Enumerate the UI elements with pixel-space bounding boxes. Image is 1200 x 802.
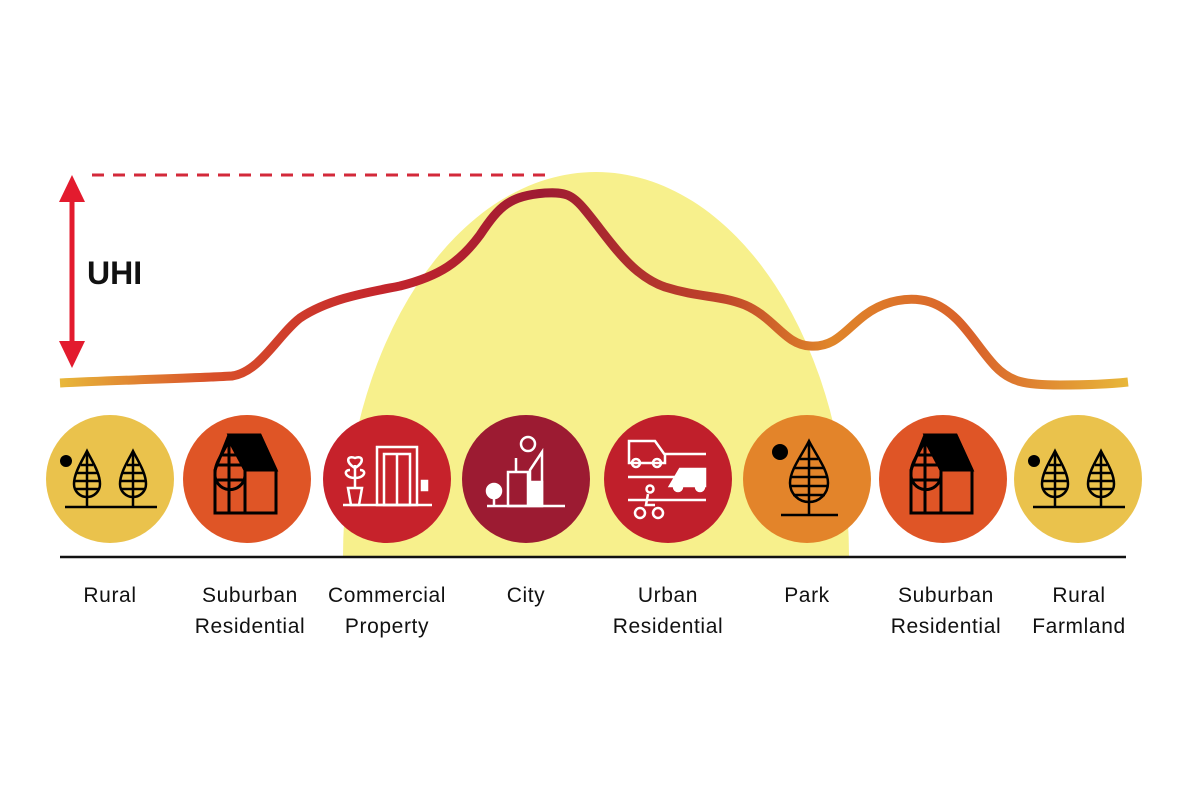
icon: rural farmland — [1014, 415, 1142, 543]
label: rural farmland — [1032, 584, 1126, 638]
temperature curve — [60, 193, 1128, 385]
label: rural farmland: Rural — [1052, 584, 1106, 607]
icon: urban residential — [604, 415, 732, 543]
background: yellow heat dome — [343, 172, 849, 557]
label: commercial property: Property — [345, 615, 429, 638]
icon: rural — [46, 415, 174, 543]
icon: suburban residential 2 — [879, 415, 1007, 543]
label: suburban residential: Suburban — [202, 584, 298, 607]
label: commercial property — [328, 584, 446, 638]
label: suburban residential: Residential — [195, 615, 305, 638]
label: suburban residential 2: Suburban — [898, 584, 994, 607]
label: rural: Rural — [83, 584, 137, 607]
label: urban residential: Urban — [638, 584, 698, 607]
label: city: City — [507, 584, 545, 607]
label: park: Park — [784, 584, 830, 607]
label: commercial property: Commercial — [328, 584, 446, 607]
label: urban residential — [613, 584, 723, 638]
baseline — [60, 556, 1126, 558]
icon: park — [743, 415, 871, 543]
label: urban residential: Residential — [613, 615, 723, 638]
label: suburban residential 2: Residential — [891, 615, 1001, 638]
icon: suburban residential — [183, 415, 311, 543]
dashed max line — [92, 174, 545, 176]
UHI label: UHI — [87, 255, 142, 291]
label: suburban residential — [195, 584, 305, 638]
icon: city — [462, 415, 590, 543]
label: suburban residential 2 — [891, 584, 1001, 638]
arrow: UHI range — [59, 175, 85, 368]
icon: commercial property — [323, 415, 451, 543]
label: rural farmland: Farmland — [1032, 615, 1126, 638]
